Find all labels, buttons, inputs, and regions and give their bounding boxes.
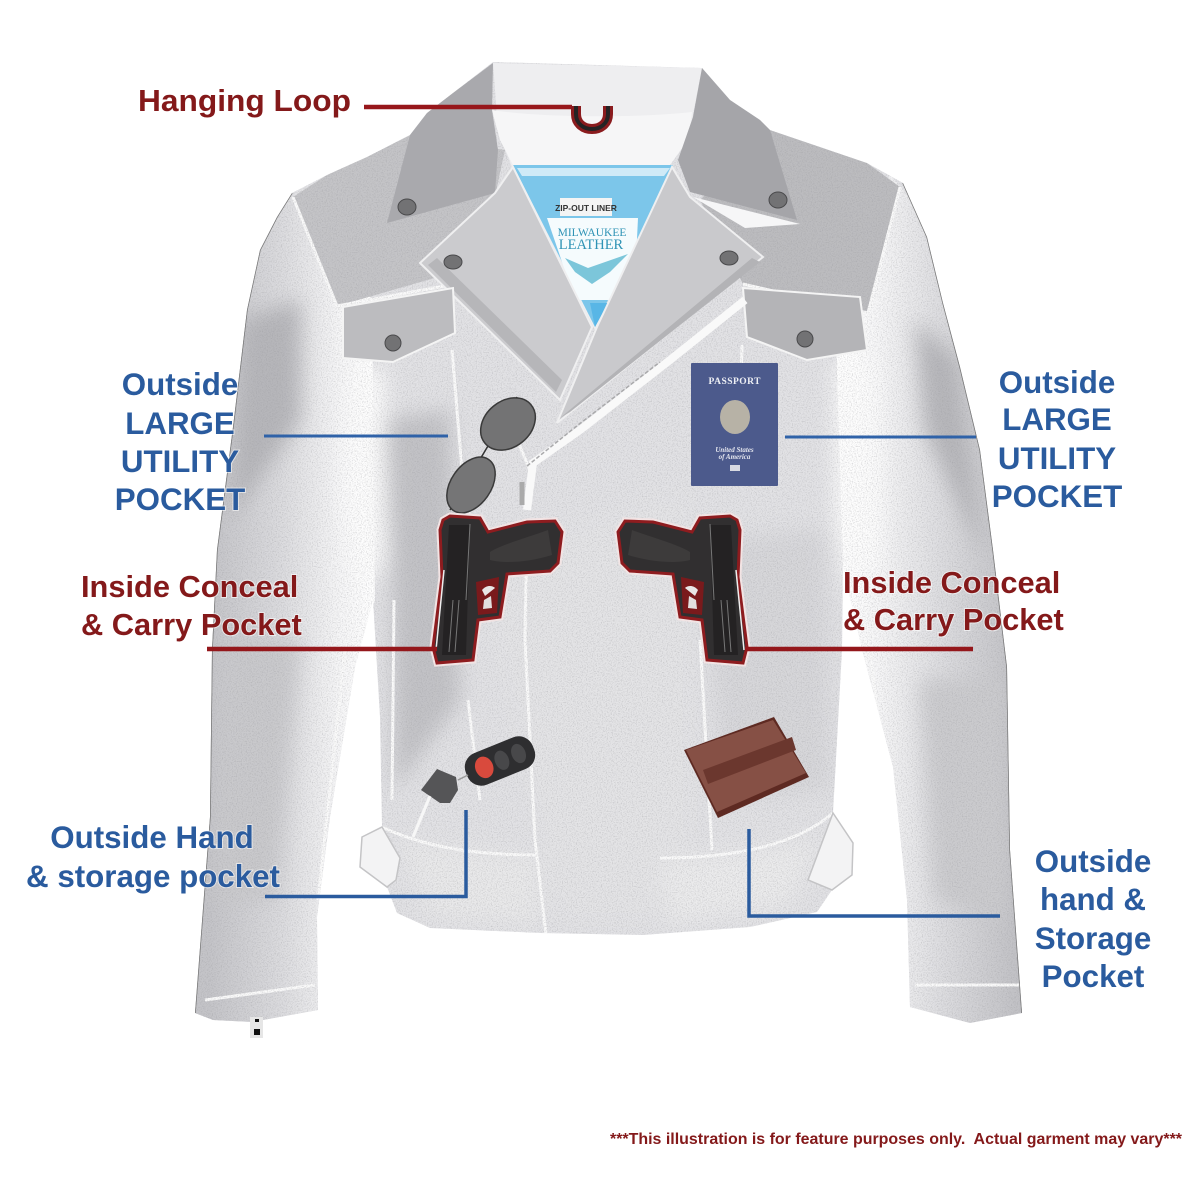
label: outside hand and storage pocket right: hand & <box>1040 882 1146 917</box>
jacket illustration: ZIP-OUT LINER <box>555 203 617 213</box>
blue lining <box>513 165 673 327</box>
icon: passport: of America <box>719 453 751 461</box>
label: inside conceal pocket right: Inside Conceal <box>843 565 1060 600</box>
label: outside large utility pocket right: POCKET <box>992 479 1122 514</box>
left lapel <box>420 167 592 400</box>
blue tip <box>590 303 608 327</box>
icon: passport: United States <box>715 446 754 454</box>
label: outside large utility pocket left: LARGE <box>125 406 235 441</box>
label: inside conceal pocket left: Inside Conceal <box>81 569 298 604</box>
grain texture <box>180 55 1040 1045</box>
label: outside large utility pocket right: LARGE <box>1002 402 1112 437</box>
icon: right pistol <box>618 516 747 663</box>
collar right <box>678 68 797 220</box>
icon: wallet <box>684 717 809 818</box>
icon: passport <box>691 363 778 486</box>
right lapel <box>557 167 763 423</box>
label: outside large utility pocket right: UTILITY <box>998 441 1116 476</box>
label: outside hand and storage pocket right: Pocket <box>1042 959 1145 994</box>
icon: sunglasses <box>437 387 546 522</box>
snap buttons <box>385 192 813 351</box>
collar left <box>387 63 498 223</box>
leader: left conceal pocket <box>207 647 437 651</box>
label: inside conceal pocket left: & Carry Pocket <box>81 607 302 642</box>
outline <box>195 193 292 1013</box>
label: outside hand and storage pocket left: Outside Hand <box>50 820 254 855</box>
leader: left utility pocket <box>264 434 448 438</box>
label: outside large utility pocket right: Outside <box>999 365 1115 400</box>
leader: hanging loop <box>364 106 608 129</box>
left lapel band <box>428 258 562 392</box>
belt tab right <box>808 813 853 890</box>
label: outside large utility pocket left: POCKET <box>115 482 245 517</box>
label: outside hand and storage pocket right: Outside <box>1035 844 1151 879</box>
shading and highlights <box>215 300 1005 925</box>
leader: right utility pocket <box>785 436 976 438</box>
label: outside large utility pocket left: UTILITY <box>121 444 239 479</box>
icon: hanging loop <box>576 106 608 129</box>
brand label <box>547 218 638 300</box>
jacket illustration <box>180 55 1040 1045</box>
leader: left hand pocket <box>265 810 466 896</box>
jacket body and sleeves <box>180 55 1040 1045</box>
right pocket flap <box>743 288 867 360</box>
icon: passport: PASSPORT <box>708 377 761 387</box>
zip out liner tag <box>560 198 612 216</box>
icon: car key fob <box>413 732 540 837</box>
white seams <box>205 187 1020 1000</box>
leader: right hand pocket <box>749 829 1000 916</box>
yoke right <box>700 130 900 313</box>
left pocket flap <box>343 288 455 362</box>
label: outside hand and storage pocket right: Storage <box>1035 921 1151 956</box>
leader: right conceal pocket <box>745 647 973 651</box>
belt tab left <box>360 827 400 887</box>
centre zipper <box>527 300 745 510</box>
label: outside large utility pocket left: Outside <box>122 367 238 402</box>
label: outside hand and storage pocket left: & storage pocket <box>26 859 281 894</box>
disclaimer: ***This illustration is for feature purposes only. Actual garment may vary*** <box>610 1131 1183 1148</box>
liner <box>493 63 702 330</box>
label: hanging loop: Hanging Loop <box>138 83 351 118</box>
yoke left <box>293 135 505 306</box>
right lapel band <box>560 258 760 418</box>
label: inside conceal pocket right: & Carry Pocket <box>843 602 1064 637</box>
brand label: LEATHER <box>559 237 624 253</box>
brand label: MILWAUKEE <box>558 227 626 239</box>
icon: left pistol <box>433 516 562 663</box>
right collar fold <box>693 197 800 228</box>
sleeve zipper <box>250 1017 263 1038</box>
